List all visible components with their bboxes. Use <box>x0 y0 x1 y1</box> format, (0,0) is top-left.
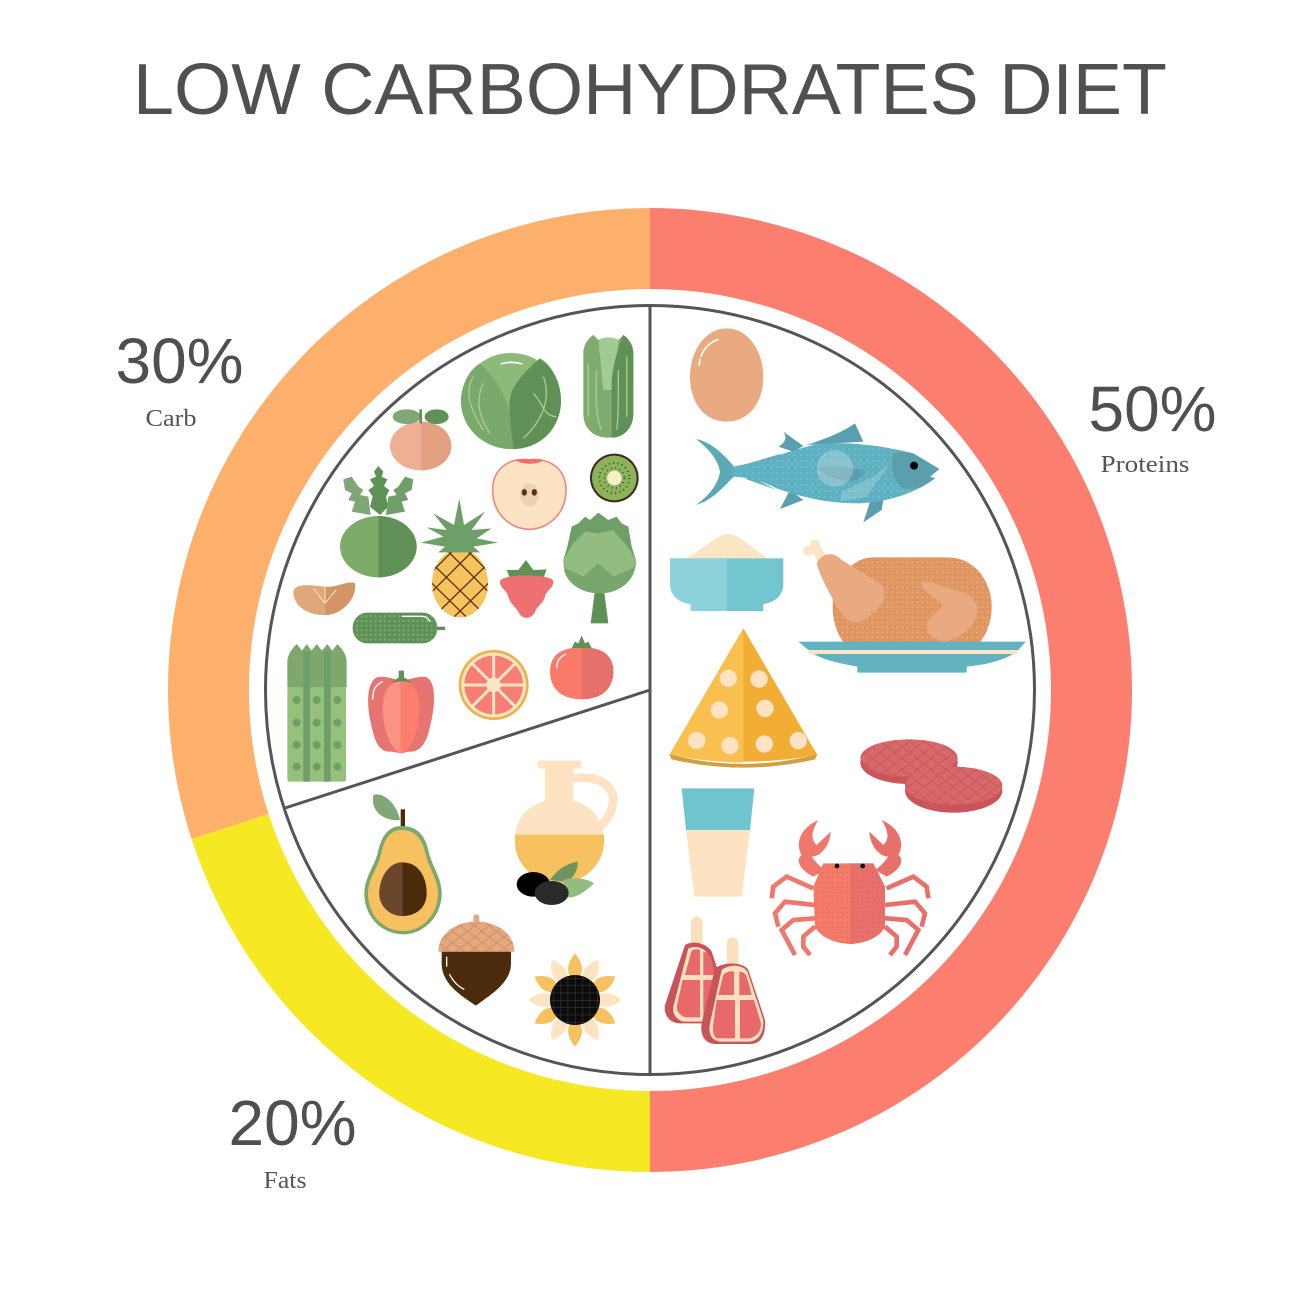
icon: chinese cabbage <box>583 335 633 438</box>
icon: bell pepper <box>368 671 434 753</box>
icon: crab <box>772 820 928 955</box>
icon: glass of milk <box>682 788 754 897</box>
label: 30% carb: Carb <box>146 406 196 432</box>
icon: kiwi <box>590 454 639 502</box>
label: 20% fats <box>228 1087 356 1194</box>
icon: sunflower <box>528 953 622 1047</box>
icon: oil jug <box>515 761 613 883</box>
fat icons group <box>364 761 622 1047</box>
icon: roast chicken on plate <box>798 540 1026 673</box>
label: 20% fats: Fats <box>264 1168 306 1194</box>
icon: asparagus <box>287 644 347 782</box>
protein icons group <box>670 328 1026 673</box>
icon: pineapple <box>421 498 498 617</box>
icon: cheese wedge <box>669 628 817 768</box>
icon: artichoke <box>563 513 636 623</box>
label: 30% carb: 30% <box>116 325 244 397</box>
label: 50% proteins: Proteins <box>1100 452 1190 478</box>
icon: cucumber <box>353 613 445 643</box>
icon: tangerine <box>390 409 451 470</box>
label: 50% proteins: 50% <box>1088 373 1216 445</box>
icon: egg <box>690 328 763 422</box>
icon: grapefruit <box>459 650 529 720</box>
icon: cabbage <box>461 353 561 449</box>
label: 50% proteins <box>1088 373 1216 478</box>
label: 20% fats: 20% <box>228 1087 356 1159</box>
icon: raspberry <box>500 560 553 618</box>
icon: orange segment <box>293 583 355 615</box>
lower carb icons group <box>287 613 613 782</box>
donut ring chart <box>168 208 1132 1172</box>
icon: steaks <box>665 917 765 1044</box>
title: LOW CARBOHYDRATES DIET <box>133 50 1167 130</box>
icon: bowl of rice <box>670 534 783 611</box>
carb icons group <box>293 335 639 623</box>
icon: tomato <box>550 635 613 699</box>
icon: burger patties <box>860 739 1002 813</box>
icon: olives <box>517 862 594 905</box>
icon: tuna fish <box>696 423 939 522</box>
plate divided into sections <box>266 306 1034 1074</box>
icon: avocado <box>364 794 442 934</box>
label: 30% carb <box>116 325 244 432</box>
icon: acorn <box>438 914 514 1006</box>
icon: apple half <box>493 459 566 529</box>
lower protein icons group <box>665 739 1002 1044</box>
icon: turnip <box>340 466 417 577</box>
